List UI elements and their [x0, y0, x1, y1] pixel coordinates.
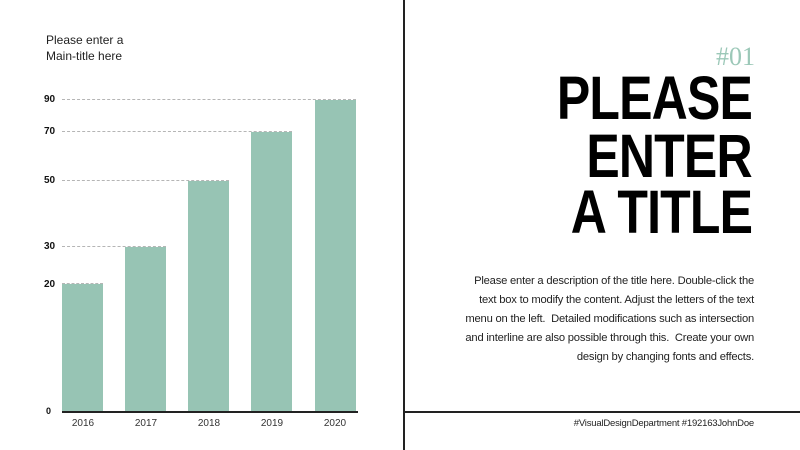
bar chart: 20: [44, 279, 55, 290]
vertical divider: [403, 0, 405, 450]
horizontal divider: [405, 411, 800, 413]
description: menu on the left. Detailed modifications such as intersection: [465, 313, 754, 325]
description: [465, 275, 754, 363]
bar chart: 2020: [324, 418, 346, 429]
bar chart: 30: [44, 241, 55, 252]
main title: ENTER: [587, 122, 752, 190]
bar chart: 50: [44, 175, 55, 186]
main title: A TITLE: [571, 178, 752, 246]
footer tags: #VisualDesignDepartment #192163JohnDoe: [574, 418, 754, 429]
description: Please enter a description of the title here. Double-click the: [474, 275, 754, 287]
description: design by changing fonts and effects.: [577, 351, 754, 363]
bar chart: 2019: [261, 418, 283, 429]
main title: PLEASE: [557, 64, 752, 132]
bar chart: 2016: [72, 418, 94, 429]
number tag: #01: [716, 42, 755, 71]
bar chart: [44, 94, 358, 429]
main title: [557, 64, 752, 246]
bar chart: 2018: [198, 418, 220, 429]
chart subtitle: Main-title here: [46, 49, 122, 63]
description: text box to modify the content. Adjust the letters of the text: [479, 294, 754, 306]
bar chart: 90: [44, 94, 55, 105]
description: and interline are also possible through this. Create your own: [465, 332, 754, 344]
chart subtitle: [46, 33, 124, 63]
chart subtitle: Please enter a: [46, 33, 123, 47]
bar chart: 70: [44, 126, 55, 137]
bar chart: 2017: [135, 418, 157, 429]
bar chart: 0: [46, 406, 51, 416]
